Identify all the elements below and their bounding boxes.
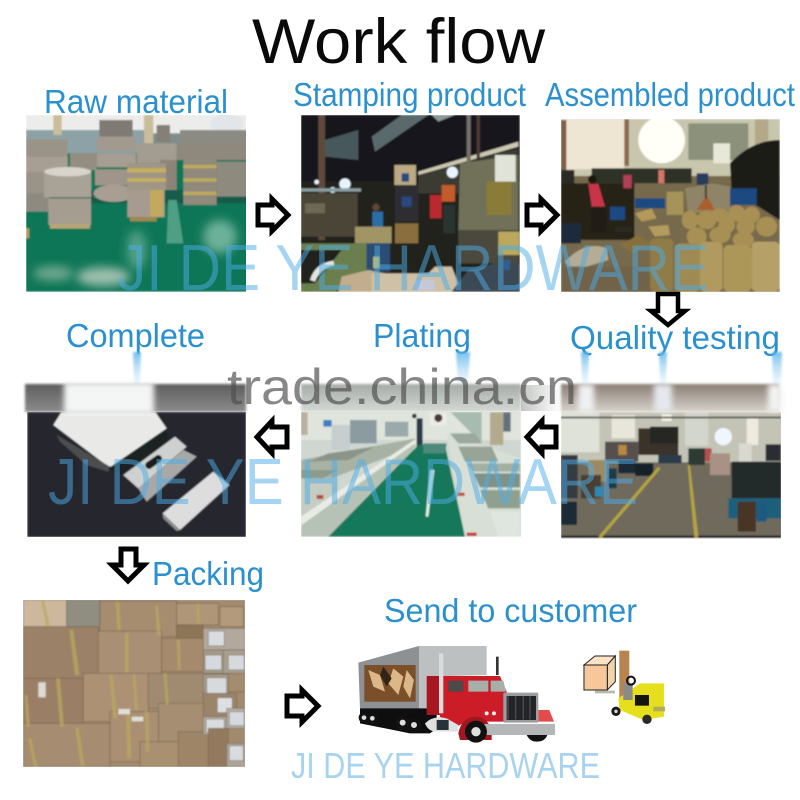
- watermark: trade.china.cn: trade.china.cn: [227, 359, 577, 415]
- watermark: ji de ye hardware (row 2): JI DE YE HARDWARE: [48, 445, 638, 518]
- label: complete: Complete: [66, 317, 205, 354]
- panel: assembled product: [545, 76, 795, 292]
- arrow: packing to truck: [287, 690, 318, 722]
- icon: delivery truck: [358, 646, 555, 743]
- label: quality testing: Quality testing: [570, 319, 780, 356]
- photo: stamping workshop: [301, 115, 520, 292]
- photo: packed cartons: [23, 600, 245, 767]
- arrow: raw material to stamping: [258, 199, 288, 231]
- panel: plating: [301, 317, 522, 537]
- photo: plating tanks: [301, 412, 522, 537]
- icon: forklift with box: [584, 651, 665, 724]
- title: Work flow: [252, 7, 546, 77]
- watermark: ji de ye hardware (row 1): JI DE YE HARDWARE: [117, 231, 709, 304]
- arrow: assembled to quality testing: [651, 294, 685, 325]
- photo: finished buckle: [27, 412, 246, 537]
- arrow: quality testing to plating: [527, 421, 556, 453]
- band: faded reflection strip: [25, 352, 782, 414]
- watermark: ji de ye hardware (footer): JI DE YE HARDWARE: [291, 745, 600, 786]
- label: raw material: Raw material: [44, 83, 228, 120]
- label: plating: Plating: [373, 317, 471, 354]
- arrow: plating to complete: [257, 421, 287, 453]
- panel: stamping product: [293, 76, 526, 292]
- arrow: stamping to assembled: [527, 199, 557, 231]
- arrow: complete to packing: [112, 549, 144, 581]
- photo: assembly floor: [561, 117, 780, 292]
- panel: quality testing: [561, 319, 782, 538]
- photo: raw material coils: [26, 113, 250, 292]
- label: packing: Packing: [152, 555, 264, 592]
- photo: quality testing floor: [561, 412, 782, 538]
- panel: complete: [27, 317, 246, 537]
- label: send to customer: Send to customer: [384, 592, 637, 629]
- panel: raw material: [26, 83, 250, 292]
- label: stamping product: Stamping product: [293, 76, 526, 113]
